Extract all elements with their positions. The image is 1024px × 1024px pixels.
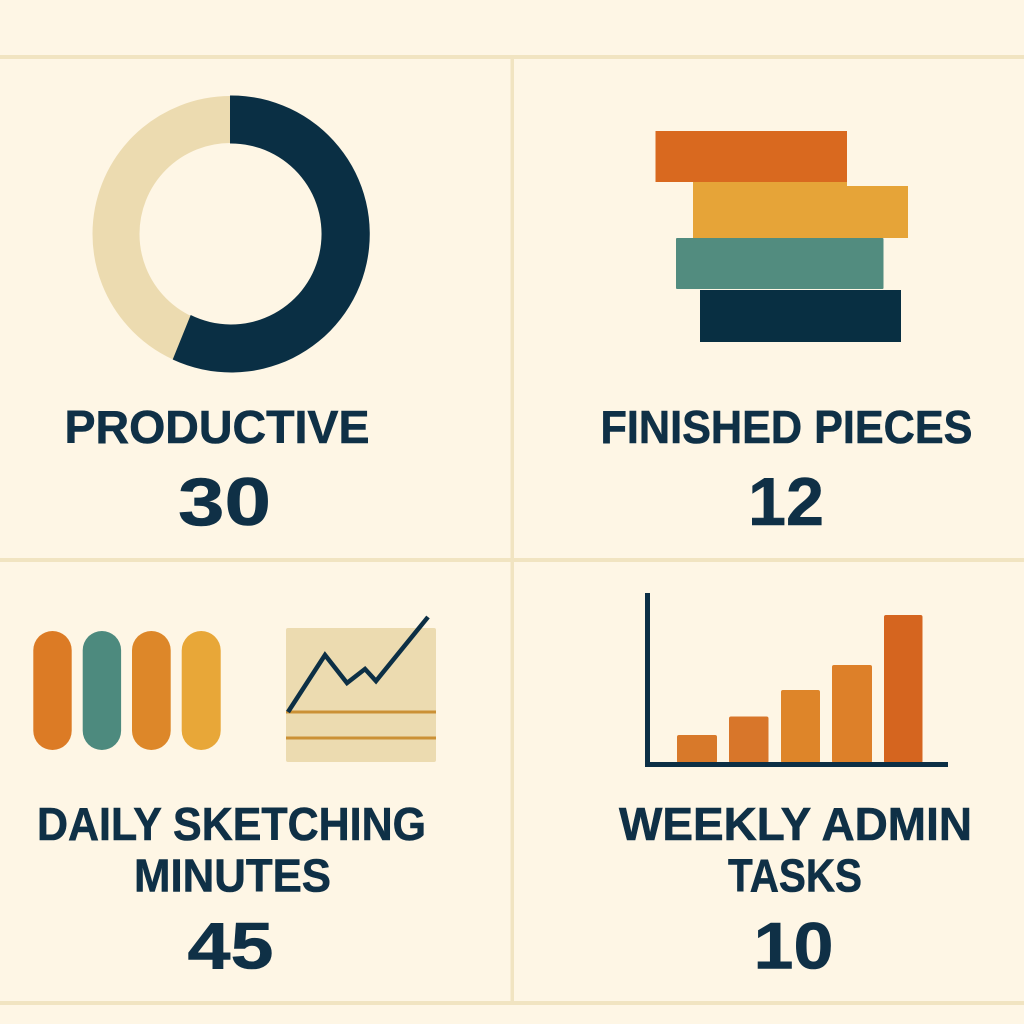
label: weekly admin tasks: WEEKLY ADMIN — [619, 798, 972, 850]
panel: daily sketching minutes — [33, 617, 436, 982]
label: daily sketching minutes: MINUTES — [134, 850, 331, 902]
value: 30: 30 — [178, 464, 271, 540]
label: daily sketching minutes — [37, 798, 426, 902]
label: daily sketching minutes: DAILY SKETCHING — [37, 798, 426, 850]
value: 45: 45 — [188, 908, 274, 982]
label: weekly admin tasks: TASKS — [728, 850, 862, 902]
panel: productive — [64, 95, 370, 540]
line chart card — [286, 617, 436, 762]
value: 10: 10 — [754, 908, 834, 982]
label: productive: PRODUCTIVE — [64, 401, 370, 453]
panel: finished pieces — [600, 131, 972, 540]
bar chart — [648, 593, 948, 764]
label: finished pieces: FINISHED PIECES — [600, 401, 972, 453]
label: weekly admin tasks — [619, 798, 972, 902]
stacked books icon — [656, 131, 908, 342]
panel: weekly admin tasks — [619, 593, 972, 982]
pill bars icon — [33, 631, 221, 750]
value: 12: 12 — [748, 464, 824, 540]
donut chart — [116, 95, 370, 372]
